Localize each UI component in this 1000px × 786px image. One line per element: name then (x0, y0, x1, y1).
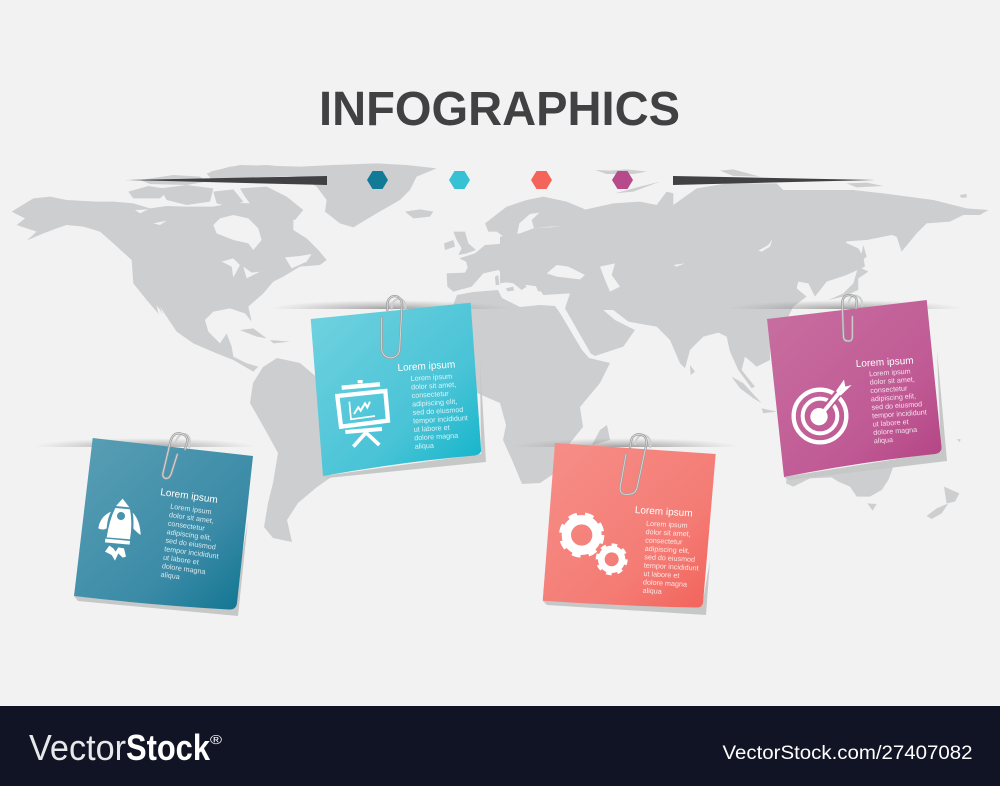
note body text: adipiscing elit, (166, 527, 212, 542)
hexagon: magenta (612, 171, 633, 189)
note body text: dolor sit amet, (169, 510, 214, 525)
note heading: Lorem ipsum (397, 359, 456, 374)
panel: teal note (33, 433, 257, 616)
note body text: adipiscing elit, (645, 544, 690, 555)
note paper (543, 443, 716, 608)
logo wordmark: Stock (126, 727, 211, 768)
right dark tapered bar (673, 176, 875, 185)
note paper (767, 300, 942, 477)
icon: rocket (98, 499, 141, 561)
note body text: tempor incididunt (413, 413, 468, 425)
note body text: aliqua (414, 441, 434, 451)
logo wordmark: ® (210, 732, 223, 747)
note body text: dolor sit amet, (869, 375, 915, 387)
note body text: Lorem ipsum (646, 519, 688, 530)
logo wordmark: Vector (29, 727, 126, 768)
image id text: VectorStock.com/27407082 (722, 742, 972, 764)
rear of paperclip (392, 299, 405, 310)
note heading: Lorem ipsum (635, 505, 693, 520)
panel: cyan note (284, 294, 488, 478)
paperclip (842, 295, 857, 341)
note body text: dolore magna (643, 577, 687, 589)
note shadow (784, 350, 947, 480)
icon: gears (561, 514, 626, 574)
paperclip (620, 434, 647, 494)
note shadow (543, 560, 710, 615)
title: INFOGRAPHICS (319, 83, 680, 136)
rear of paperclip (175, 434, 190, 448)
footer bar (0, 706, 1000, 786)
map: asia (500, 169, 988, 442)
hexagon: teal (367, 171, 388, 189)
note shadow (323, 360, 486, 478)
panel: magenta note (748, 294, 950, 480)
note shadow (74, 520, 248, 616)
note body text: ut labore et (872, 417, 909, 429)
note body text: ut labore et (413, 423, 450, 434)
note paper (74, 438, 253, 610)
left dark tapered bar (125, 176, 327, 185)
map: australia and new zealand (786, 467, 959, 519)
hexagon markers (367, 171, 633, 189)
note heading: Lorem ipsum (160, 487, 218, 506)
paperclip (382, 296, 402, 358)
note body text: consectetur (411, 389, 450, 400)
note body text: adipiscing elit, (871, 391, 916, 403)
hexagon: coral (531, 171, 552, 189)
note body text: tempor incididunt (164, 544, 219, 561)
map: africa (440, 290, 610, 484)
map: europe (444, 197, 610, 292)
note body text: sed do eiusmod (165, 536, 216, 552)
note body text: sed do eiusmod (871, 399, 922, 412)
note body text: tempor incididunt (872, 407, 927, 420)
note body text: Lorem ipsum (869, 366, 911, 378)
note body text: aliqua (642, 586, 662, 596)
note body text: ut labore et (163, 553, 199, 567)
rear of paperclip (635, 435, 651, 448)
hexagon: cyan (449, 171, 470, 189)
note body text: tempor incididunt (644, 561, 699, 573)
world map (12, 163, 988, 542)
panel: coral note (532, 433, 726, 615)
shadow band (532, 439, 726, 447)
note body text: aliqua (160, 570, 180, 581)
shadow band (284, 301, 488, 309)
note body text: sed do eiusmod (412, 405, 464, 417)
shadow band (748, 301, 950, 309)
note body text: Lorem ipsum (410, 371, 452, 383)
map: greenland and iceland (210, 163, 437, 227)
note body text: sed do eiusmod (644, 552, 695, 564)
note body text: ut labore et (643, 569, 680, 580)
note body text: adipiscing elit, (412, 397, 457, 408)
note heading: Lorem ipsum (856, 355, 914, 370)
note body text: dolore magna (414, 431, 458, 442)
note body text: consectetur (167, 519, 206, 533)
icon: target with arrow (794, 380, 852, 442)
note body text: aliqua (873, 435, 893, 445)
map: south america (250, 358, 345, 542)
note body text: dolor sit amet, (645, 527, 691, 538)
note body text: Lorem ipsum (170, 502, 212, 516)
note paper (311, 303, 481, 476)
icon: presentation board (337, 380, 388, 447)
logo wordmark (29, 727, 223, 768)
note body text: consectetur (645, 535, 683, 546)
rear of paperclip (848, 296, 862, 307)
note body text: dolor sit amet, (411, 380, 456, 391)
note body text: consectetur (870, 383, 908, 395)
shadow band (47, 439, 243, 447)
note body text: dolore magna (873, 425, 917, 437)
paperclip (163, 433, 187, 478)
note body text: dolore magna (161, 561, 206, 576)
map: north america (12, 163, 437, 372)
